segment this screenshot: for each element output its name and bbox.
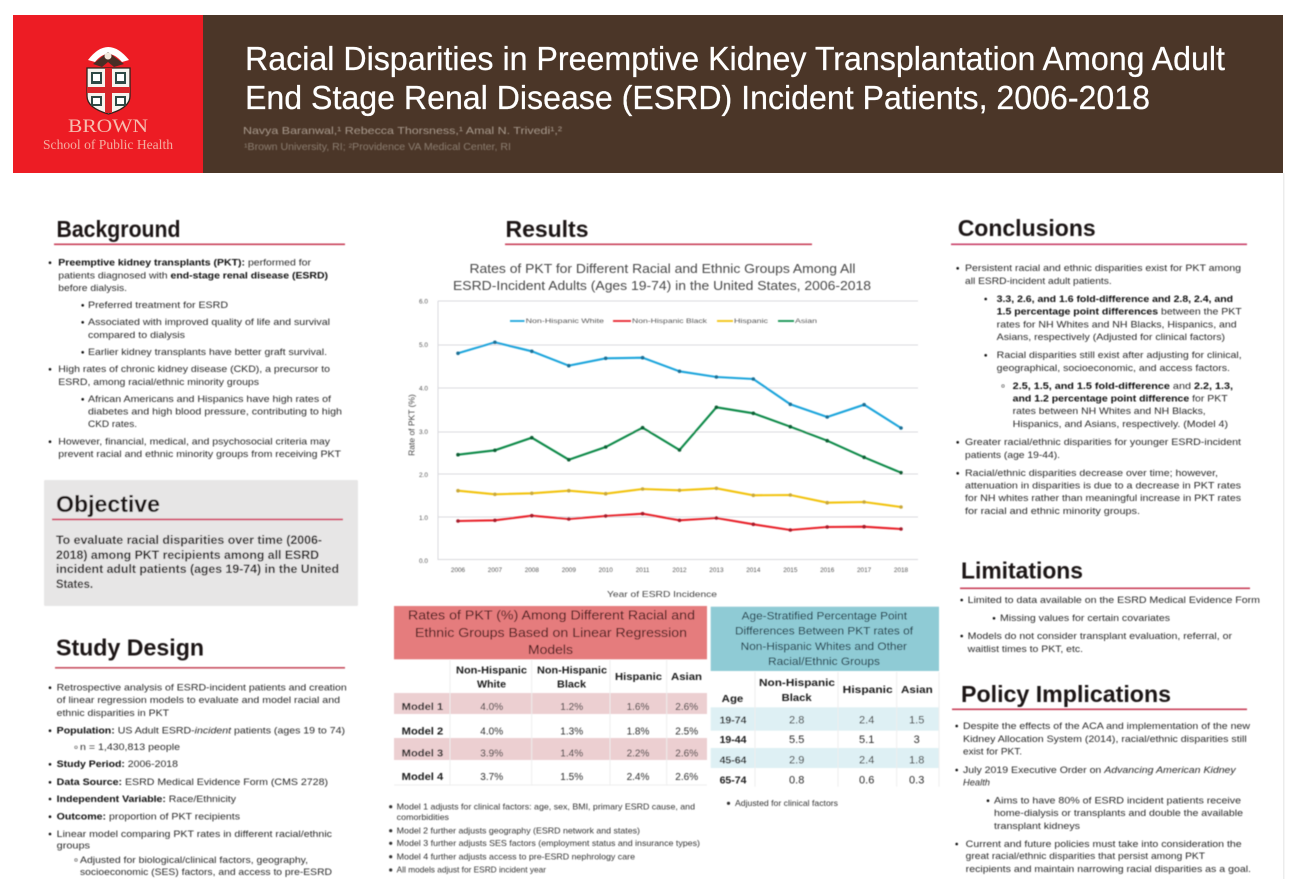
study design text: ethnic disparities in PKT <box>57 707 169 718</box>
conclusions text: 1.5 percentage point differences between the PKT <box>997 306 1242 316</box>
table title: Differences Between PKT rates of <box>735 626 914 638</box>
table header: Non-Hispanic <box>537 666 607 676</box>
objective text <box>56 533 339 591</box>
table rows: 1.4% <box>560 748 583 760</box>
study design text: n = 1,430,813 people <box>80 741 180 752</box>
table rows: 2.4% <box>627 772 650 783</box>
y axis labels: 6.0 <box>419 298 428 306</box>
table rows: 1.5% <box>560 772 583 783</box>
table rows: 4.0% <box>480 726 503 738</box>
background text: prevent racial and ethnic minority groups from receiving PKT <box>58 448 341 459</box>
chart title <box>453 261 871 293</box>
table rows: Model 2 <box>402 726 444 738</box>
table rows <box>720 714 924 786</box>
y axis labels: 3.0 <box>419 429 428 436</box>
table title: Ethnic Groups Based on Linear Regression <box>415 625 687 640</box>
conclusions text: Greater racial/ethnic disparities for younger ESRD-incident <box>965 436 1241 447</box>
policy text <box>955 720 1251 874</box>
table rows: 2.4 <box>859 714 874 726</box>
table rows: 2.6% <box>675 772 698 783</box>
study design text: Retrospective analysis of ESRD-incident patients and creation <box>57 682 347 692</box>
header banner <box>13 15 1283 173</box>
y axis labels: 4.0 <box>419 386 428 392</box>
table rows: 5.5 <box>789 734 804 746</box>
table title <box>711 607 939 671</box>
x axis labels <box>451 567 909 574</box>
table header: Non-Hispanic <box>456 666 527 676</box>
limitations text: Missing values for certain covariates <box>1000 612 1170 623</box>
y axis title: Rate of PKT (%) <box>406 394 416 456</box>
table rows: 1.8 <box>909 754 924 766</box>
limitations text: waitlist times to PKT, etc. <box>967 643 1083 654</box>
conclusions text: attenuation in disparities is due to a decrease in PKT rates <box>965 480 1241 490</box>
heading: background: Background <box>56 216 180 242</box>
table rows: 0.8 <box>789 774 804 786</box>
table footnotes: comorbidities <box>397 813 449 822</box>
logo wordmark: School of Public Health <box>43 137 173 152</box>
table header <box>456 666 702 690</box>
title: Racial Disparities in Preemptive Kidney Transplantation Among Adult <box>245 41 1226 78</box>
table title <box>394 606 707 659</box>
table rows: 19-74 <box>720 714 747 726</box>
study design text: of linear regression models to evaluate and model racial and <box>57 694 340 705</box>
table header: Hispanic <box>843 685 893 696</box>
table header: Age <box>722 694 744 705</box>
series: Hispanic <box>456 486 903 509</box>
panel: objective <box>44 480 358 606</box>
study design text <box>49 682 347 877</box>
background text: Preemptive kidney transplants (PKT): performed for <box>58 256 311 268</box>
background text: African Americans and Hispanics have high rates of <box>88 393 331 404</box>
panel: limitations <box>960 558 1260 654</box>
background text: before dialysis. <box>58 282 127 293</box>
policy text: recipients and maintain narrowing racial disparities as a goal. <box>966 863 1251 874</box>
conclusions text: and 1.2 percentage point difference for PKT <box>1013 392 1228 404</box>
table rows: 0.3 <box>909 774 924 786</box>
panel: background <box>49 216 345 459</box>
policy text: Aims to have 80% of ESRD incident patients receive <box>994 794 1241 806</box>
table footnotes: Model 2 further adjusts geography (ESRD network and states) <box>397 826 640 836</box>
x axis labels: 2017 <box>857 567 872 574</box>
objective text: 2018) among PKT recipients among all ESRD <box>56 548 319 562</box>
conclusions text: Persistent racial and ethnic disparities exist for PKT among <box>965 262 1241 273</box>
study design text: Linear model comparing PKT rates in different racial/ethnic <box>57 828 332 839</box>
icon: Brown crest <box>87 47 130 114</box>
conclusions text: 2.5, 1.5, and 1.5 fold-difference and 2.2, 1.3, <box>1013 380 1233 391</box>
policy text: July 2019 Executive Order on Advancing American Kidney <box>963 764 1237 775</box>
study design text: Study Period: 2006-2018 <box>57 758 178 769</box>
y axis labels: 0.0 <box>419 558 428 565</box>
table rows: 1.6% <box>627 702 650 713</box>
y axis labels: 1.0 <box>419 515 428 522</box>
table footnotes: Model 1 adjusts for clinical factors: age, sex, BMI, primary ESRD cause, and <box>397 802 695 812</box>
table rows: 2.2% <box>627 748 650 760</box>
table rows: 45-64 <box>720 754 747 766</box>
authors: Navya Baranwal,¹ Rebecca Thorsness,¹ Amal N. Trivedi¹,² <box>243 125 563 137</box>
background text: ESRD, among racial/ethnic minority groups <box>58 376 259 387</box>
conclusions text: Racial/ethnic disparities decrease over time; however, <box>965 467 1218 478</box>
study design text: Independent Variable: Race/Ethnicity <box>57 793 236 804</box>
limitations text: Limited to data available on the ESRD Medical Evidence Form <box>968 594 1260 605</box>
table footnotes <box>389 802 700 874</box>
y axis labels: 2.0 <box>419 472 428 479</box>
table rows: Model 1 <box>402 702 444 713</box>
study design text: Population: US Adult ESRD- incident patients (ages 19 to 74) <box>57 724 345 736</box>
conclusions text: Racial disparities still exist after adjusting for clinical, <box>997 349 1242 360</box>
table rows: Model 4 <box>402 772 444 783</box>
chart title: Rates of PKT for Different Racial and Ethnic Groups Among All <box>470 261 856 276</box>
conclusions text: Asians, respectively (Adjusted for clinical factors) <box>997 331 1225 342</box>
table title: Racial/Ethnic Groups <box>768 656 880 668</box>
study design text: Data Source: ESRD Medical Evidence Form (CMS 2728) <box>57 776 328 787</box>
conclusions text: rates for NH Whites and NH Blacks, Hispanics, and <box>997 318 1237 330</box>
table rows: 2.6% <box>675 702 698 713</box>
heading: limitations: Limitations <box>961 558 1083 584</box>
title: End Stage Renal Disease (ESRD) Incident Patients, 2006-2018 <box>245 80 1150 117</box>
series: Asian <box>456 406 903 475</box>
table rows: 1.3% <box>560 726 583 738</box>
table header: Hispanic <box>615 672 662 683</box>
table rows: Model 3 <box>402 748 444 760</box>
table footnote: Adjusted for clinical factors <box>735 799 838 808</box>
background text: Associated with improved quality of life and survival <box>88 316 330 327</box>
limitations text: Models do not consider transplant evaluation, referral, or <box>968 630 1232 641</box>
table rows: 1.2% <box>560 702 583 713</box>
heading: results: Results <box>506 216 588 242</box>
series: Non-Hispanic Black <box>456 512 903 532</box>
table header: Asian <box>671 672 702 683</box>
x axis labels: 2010 <box>599 567 613 574</box>
study design text: Outcome: proportion of PKT recipients <box>57 810 240 822</box>
limitations text <box>960 594 1260 654</box>
background text: High rates of chronic kidney disease (CKD), a precursor to <box>58 363 330 374</box>
background text: Preferred treatment for ESRD <box>88 299 228 310</box>
table rows <box>402 702 698 783</box>
panel: policy implications <box>952 681 1251 874</box>
panel: conclusions <box>951 215 1247 516</box>
objective text: incident adult patients (ages 19-74) in the United <box>56 562 339 576</box>
table title: Age-Stratified Percentage Point <box>742 610 908 622</box>
table header: Non-Hispanic <box>759 678 835 689</box>
x axis title: Year of ESRD Incidence <box>607 589 717 599</box>
conclusions text: patients (age 19-44). <box>965 449 1060 460</box>
policy text: exist for PKT. <box>963 746 1022 756</box>
heading: study design: Study Design <box>56 634 204 660</box>
x axis labels: 2012 <box>672 567 687 574</box>
table header: White <box>477 680 506 690</box>
legend <box>510 318 817 325</box>
conclusions text <box>956 262 1242 516</box>
table rows: 65-74 <box>720 774 747 786</box>
policy text: Kidney Allocation System (2014), racial/ethnic disparities still <box>963 733 1247 744</box>
background text <box>49 256 342 459</box>
background text: patients diagnosed with end-stage renal disease (ESRD) <box>58 270 328 280</box>
heading: objective: Objective <box>56 491 160 517</box>
x axis labels: 2013 <box>709 567 724 574</box>
x axis labels: 2011 <box>636 567 650 574</box>
table rows: 4.0% <box>480 702 503 713</box>
table rows: 3.7% <box>480 772 503 783</box>
conclusions text: for racial and ethnic minority groups. <box>965 505 1140 516</box>
legend: Non-Hispanic White <box>526 318 604 325</box>
study design text: Adjusted for biological/clinical factors, geography, <box>80 854 308 865</box>
y axis labels: 5.0 <box>419 342 428 349</box>
policy text: transplant kidneys <box>994 820 1080 831</box>
conclusions text: all ESRD-incident adult patients. <box>965 275 1112 286</box>
legend: Non-Hispanic Black <box>632 318 708 325</box>
objective text: To evaluate racial disparities over time (2006- <box>56 533 322 547</box>
table header: Black <box>782 693 812 704</box>
study design text: groups <box>57 840 90 850</box>
line chart: PKT rates <box>406 261 918 599</box>
x axis labels: 2006 <box>451 567 466 574</box>
x axis labels: 2014 <box>746 567 761 574</box>
logo wordmark <box>43 116 173 152</box>
background text: diabetes and high blood pressure, contributing to high <box>88 406 342 416</box>
table footnotes: Model 4 further adjusts access to pre-ESRD nephrology care <box>397 852 635 862</box>
x axis labels: 2008 <box>525 567 539 574</box>
table rows: 5.1 <box>859 734 874 746</box>
series: Non-Hispanic White <box>456 340 903 430</box>
table rows: 2.6% <box>675 748 698 760</box>
table rows: 2.5% <box>675 726 698 738</box>
objective text: States. <box>56 577 93 591</box>
table: age-stratified differences <box>711 607 939 808</box>
conclusions text: Hispanics, and Asians, respectively. (Model 4) <box>1013 418 1228 429</box>
table header <box>722 678 933 705</box>
table title: Rates of PKT (%) Among Different Racial and <box>408 608 695 622</box>
table rows: 2.9 <box>789 754 804 766</box>
heading: conclusions: Conclusions <box>958 215 1096 241</box>
logo panel <box>13 15 203 173</box>
legend: Hispanic <box>734 318 769 325</box>
background text: compared to dialysis <box>88 329 185 340</box>
table rows: 3.9% <box>480 748 503 760</box>
table header: Black <box>557 680 586 690</box>
conclusions text: for NH whites rather than meaningful increase in PKT rates <box>965 492 1241 503</box>
x axis labels: 2007 <box>488 567 502 574</box>
table rows: 2.8 <box>789 714 804 726</box>
authors: ¹Brown University, RI; ²Providence VA Medical Center, RI <box>244 142 511 153</box>
table: regression model rates <box>389 606 707 874</box>
title <box>245 41 1226 117</box>
heading: policy implications: Policy Implications <box>961 681 1171 707</box>
policy text: home-dialysis or transplants and double the available <box>994 807 1243 818</box>
authors <box>243 125 563 153</box>
table rows: 2.4 <box>859 754 874 766</box>
study design text: socioeconomic (SES) factors, and access to pre-ESRD <box>80 866 332 877</box>
x axis labels: 2018 <box>894 567 909 574</box>
policy text: Current and future policies must take into consideration the <box>966 838 1242 849</box>
table rows: 0.6 <box>859 774 874 786</box>
logo wordmark: BROWN <box>68 116 148 137</box>
x axis labels: 2009 <box>562 567 576 574</box>
background text: Earlier kidney transplants have better graft survival. <box>88 346 327 357</box>
conclusions text: rates between NH Whites and NH Blacks, <box>1013 405 1206 416</box>
table rows: 1.8% <box>627 726 650 738</box>
policy text: great racial/ethnic disparities that persist among PKT <box>966 850 1205 861</box>
background text: However, financial, medical, and psychosocial criteria may <box>58 436 330 446</box>
conclusions text: 3.3, 2.6, and 1.6 fold-difference and 2.8, 2.4, and <box>997 293 1233 304</box>
legend: Asian <box>795 318 817 325</box>
chart title: ESRD-Incident Adults (Ages 19-74) in the United States, 2006-2018 <box>453 278 871 293</box>
table rows: 19-44 <box>720 734 747 746</box>
table header: Asian <box>901 685 933 696</box>
x axis labels: 2015 <box>783 567 798 574</box>
policy text: Health <box>963 776 990 788</box>
table title: Models <box>528 642 574 657</box>
table footnotes: Model 3 further adjusts SES factors (employment status and insurance types) <box>397 839 700 848</box>
y axis labels <box>419 298 428 565</box>
table rows: 1.5 <box>909 714 924 726</box>
x axis labels: 2016 <box>820 567 835 574</box>
policy text: Despite the effects of the ACA and implementation of the new <box>963 720 1250 731</box>
table title: Non-Hispanic Whites and Other <box>741 641 907 653</box>
table footnotes: All models adjust for ESRD incident year <box>397 866 546 874</box>
conclusions text: geographical, socioeconomic, and access factors. <box>997 362 1230 373</box>
background text: CKD rates. <box>88 418 137 429</box>
table rows: 3 <box>914 734 920 746</box>
panel: study design <box>49 634 347 877</box>
